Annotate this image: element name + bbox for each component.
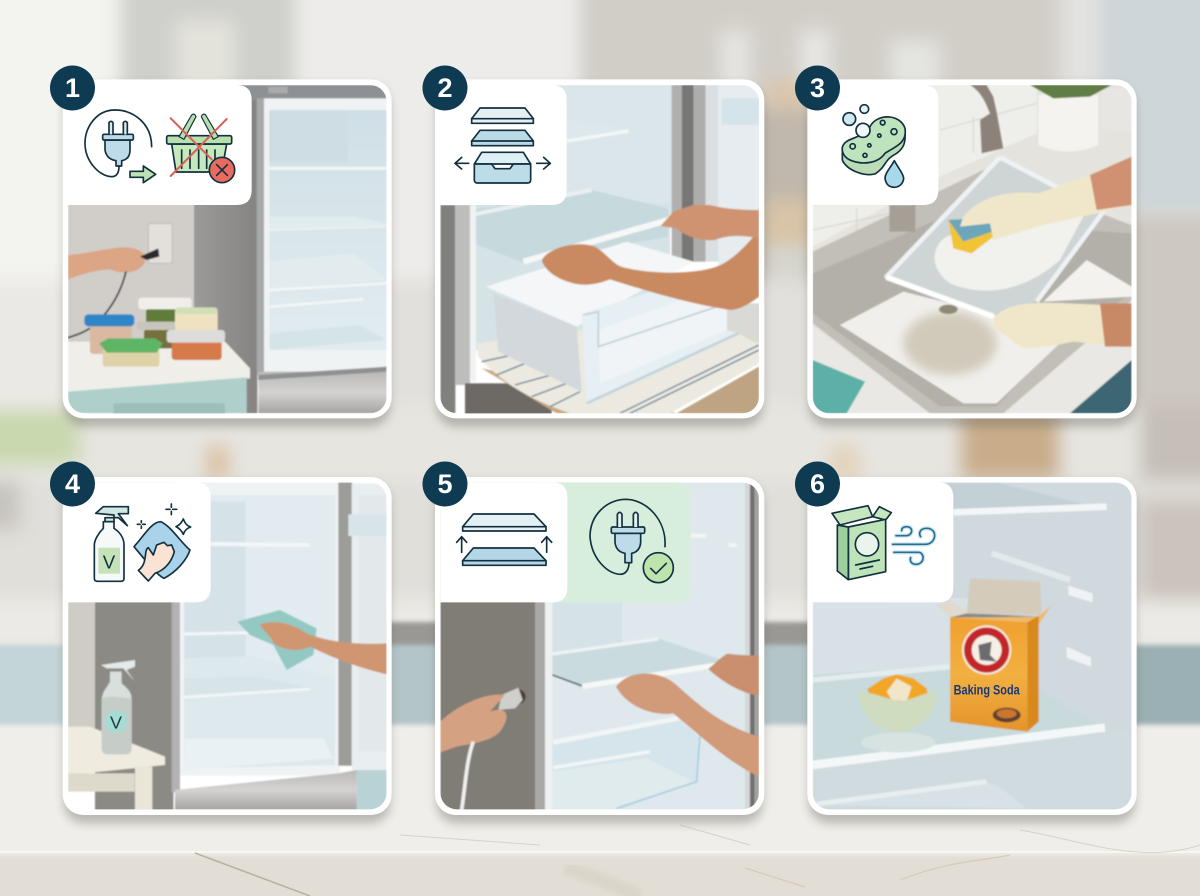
- step number badge 4: 4: [65, 469, 80, 499]
- cloth and arm: [237, 610, 317, 670]
- step number badge 5: 5: [437, 469, 453, 499]
- icon: plug with check: [590, 499, 673, 583]
- step number badge 2: [422, 66, 468, 110]
- white icon card: [440, 482, 567, 602]
- counter: [68, 342, 250, 392]
- photo: hands sliding shelf out above drawer: [440, 85, 760, 417]
- box label text: Baking Soda: [954, 681, 1020, 697]
- step number badge 6: [795, 462, 840, 506]
- sponge: [948, 219, 994, 254]
- panel 6: deodorize with baking soda: [807, 477, 1137, 823]
- panel 2: remove shelves and drawers: [435, 79, 764, 427]
- faucet: [889, 205, 915, 232]
- photo: replacing shelf and plugging in: [440, 482, 759, 811]
- label V on bottle: V: [110, 712, 122, 732]
- icon: shelves and drawer with arrows: [455, 108, 550, 183]
- icon: hand wiping with cloth and sparkles: [134, 504, 191, 581]
- photo: hand wiping fridge interior: [68, 482, 387, 811]
- panel 1: unplug and remove food: [63, 79, 392, 427]
- gloves: [959, 175, 1124, 240]
- drawer: [493, 293, 582, 392]
- hands: [542, 230, 759, 310]
- hand with plug: [519, 689, 526, 704]
- icon: spray bottle with V label: [94, 507, 128, 581]
- table: [68, 727, 165, 775]
- photo: gloved hands scrubbing shelf in soapy sink: [813, 85, 1132, 413]
- step number badge 1: 1: [65, 73, 80, 103]
- step number badge 2: 2: [437, 73, 453, 103]
- step number badge 5: [422, 462, 468, 506]
- icon card: [440, 85, 567, 205]
- bowl with peels: [861, 732, 936, 752]
- step number badge 6: 6: [810, 469, 825, 499]
- icon: plug with cord and arrow: [85, 110, 156, 183]
- icon: basket crossed out: [167, 114, 235, 183]
- photo: baking soda and orange peels on fridge shelf: [813, 482, 1132, 811]
- icon: spray bottle with V label: V: [103, 551, 116, 572]
- icon: open box with fresh air: [832, 506, 935, 580]
- towel and board: [482, 368, 680, 414]
- panel 3: wash shelf in sink: [807, 79, 1137, 427]
- icon card: [68, 482, 211, 602]
- step number badge 1: [50, 66, 95, 110]
- spray bottle: [101, 670, 132, 699]
- plant pots: [1038, 95, 1098, 152]
- panel 5: replace shelves and plug back in: [435, 477, 764, 823]
- step number badge 3: 3: [810, 73, 825, 103]
- sink: [813, 170, 1132, 413]
- step number badge 3: [795, 66, 840, 110]
- panel 4: wipe interior with vinegar spray: [63, 477, 392, 823]
- icon card: [813, 85, 938, 205]
- photo: fridge and food containers on counter: [68, 85, 387, 417]
- outlet: [148, 223, 172, 263]
- step number badge 4: [50, 462, 95, 506]
- green icon card: plug back in: [543, 482, 691, 602]
- icon: shelves going up: [457, 514, 552, 565]
- containers: [138, 298, 192, 309]
- arm, hands on shelf: [616, 673, 759, 777]
- icon card: [813, 482, 953, 602]
- icon card: [68, 85, 252, 205]
- glass shelf: [887, 157, 1103, 316]
- baking soda box: [967, 578, 1042, 615]
- icon: sponge with bubbles and drop: [842, 105, 905, 187]
- marble counter edge and veins: [0, 825, 1200, 896]
